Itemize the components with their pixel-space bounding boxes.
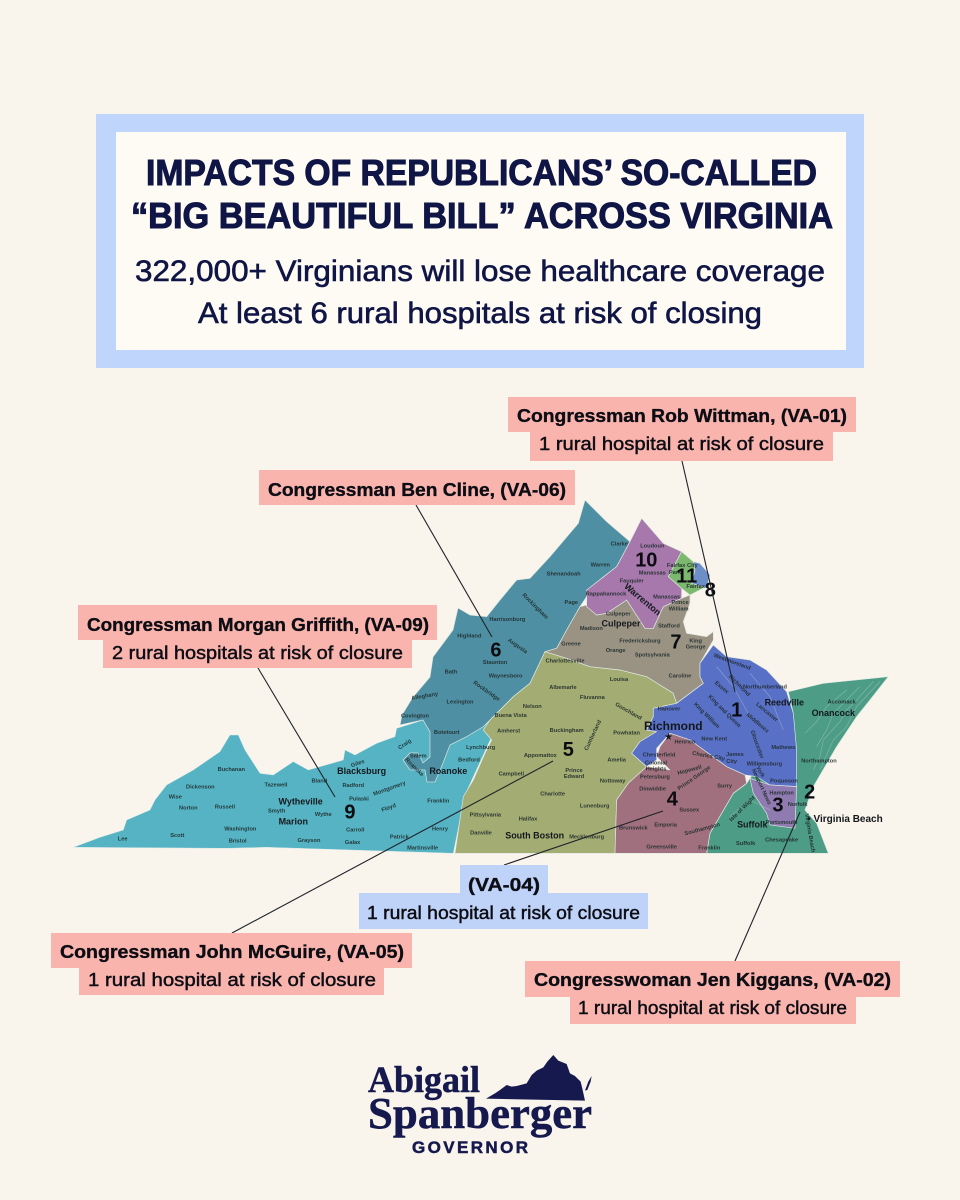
district 9: [73, 680, 493, 853]
county labels east: Charlottesville: [545, 659, 584, 665]
wetlands texture: [717, 667, 880, 817]
county labels east: Mecklenburg: [569, 835, 605, 841]
county labels east: Mathews: [771, 745, 795, 751]
county labels east: Newport News: [750, 768, 772, 806]
county labels east: 4: [667, 789, 678, 811]
county labels east: Halifax: [519, 816, 538, 822]
logo wordmark: Abigail: [368, 1060, 480, 1101]
county labels west: Salem: [410, 754, 427, 760]
district 10: [587, 518, 682, 628]
subheading: At least 6 rural hospitals at risk of closing: [198, 297, 762, 330]
county labels east: Lancaster: [754, 702, 779, 724]
county labels east: Suffolk: [736, 841, 756, 847]
county labels west: Alleghany: [411, 691, 439, 702]
county labels east: Onancock: [812, 708, 855, 718]
district 7: [545, 595, 713, 703]
logo: Abigail Spanberger Governor: [368, 1055, 592, 1157]
county labels east: Warren: [591, 563, 611, 569]
county labels west: Russell: [215, 805, 235, 811]
county labels east: Rappahannock: [586, 592, 627, 598]
county labels east: Shenandoah: [547, 571, 581, 577]
callout: John McGuire VA-05: Congressman John McGuire, (VA-05): [60, 941, 404, 962]
callout: VA-04: 1 rural hospital at risk of closure: [367, 902, 640, 923]
county labels east: Fredericksburg: [619, 639, 661, 645]
callout: VA-04: (VA-04): [468, 874, 540, 895]
county labels east: Caroline: [669, 673, 691, 679]
county labels west: Wise: [169, 795, 182, 801]
county labels east: Prince George: [677, 765, 712, 792]
county labels east: Buckingham: [550, 728, 584, 734]
county labels east: Petersburg: [640, 775, 670, 781]
county labels west: Grayson: [297, 838, 321, 844]
county labels west: Patrick: [390, 835, 410, 841]
county labels east: Stafford: [658, 624, 680, 630]
county labels west: Franklin: [427, 799, 450, 805]
county labels east: Edward: [564, 774, 585, 780]
county labels east: Clarke: [611, 542, 628, 548]
county labels east: Buena Vista: [495, 713, 528, 719]
logo wordmark: [368, 1060, 592, 1138]
district 8: [692, 562, 710, 588]
county labels west: Norton: [179, 806, 198, 812]
county labels east: Lexington: [446, 699, 474, 705]
county labels east: Loudoun: [640, 544, 665, 550]
county labels east: Manassas: [639, 570, 666, 576]
county labels east: 1: [731, 700, 742, 722]
callout: Jen Kiggans VA-02: Congresswoman Jen Kiggans, (VA-02): [534, 969, 891, 990]
county labels east: Prince: [671, 600, 689, 606]
county labels east: 6: [490, 640, 502, 662]
county labels east: 10: [635, 550, 657, 572]
county labels east: Reedville: [765, 697, 804, 707]
county labels east: Suffolk: [737, 820, 768, 830]
callout: Jen Kiggans VA-02: [525, 961, 900, 1024]
county labels east: Virginia Beach: [803, 813, 816, 853]
county labels east: 8: [705, 580, 716, 602]
county labels east: Isle of Wight: [729, 795, 757, 823]
callout: Morgan Griffith VA-09: 2 rural hospitals at risk of closure: [112, 642, 403, 663]
county labels east: Danville: [470, 830, 492, 836]
county labels west: Buchanan: [218, 767, 246, 773]
county labels east: Brunswick: [619, 826, 648, 832]
logo tagline: GOVERNOR: [412, 1138, 528, 1157]
county labels west: Lee: [118, 836, 128, 842]
county labels east: Warrenton: [622, 581, 663, 618]
county labels east: Northampton: [801, 758, 837, 764]
county labels east: Gloucester: [749, 730, 765, 760]
county labels east: Poquoson: [770, 778, 798, 784]
county labels east: Cumberland: [584, 719, 603, 752]
county labels west: Montgomery: [373, 780, 407, 798]
county labels east: Charlotte: [540, 792, 565, 798]
county labels east: Goochland: [614, 702, 643, 722]
county labels east: York: [754, 765, 766, 780]
county labels west: Henry: [432, 826, 449, 832]
county labels west: Pulaski: [349, 797, 369, 803]
county labels east: Highland: [457, 633, 482, 639]
county labels east: • Virginia Beach: [807, 814, 883, 825]
county labels east: Middlesex: [745, 712, 770, 735]
county labels east: Northumberland: [743, 685, 788, 691]
district 6: [400, 500, 630, 782]
county labels east: Amelia: [607, 757, 627, 763]
county labels east: Madison: [580, 626, 603, 632]
county labels east: Chesapeake: [765, 838, 798, 844]
icon: Virginia silhouette: [486, 1055, 592, 1101]
callout: Jen Kiggans VA-02: 1 rural hospital at risk of closure: [578, 997, 847, 1018]
county labels east: ★: [665, 731, 674, 741]
county labels east: Manassas: [653, 594, 680, 600]
callout: Ben Cline VA-06: [259, 470, 575, 505]
callout: Rob Wittman VA-01: [508, 397, 856, 461]
county labels east: King William: [692, 702, 720, 730]
county labels west: Carroll: [346, 827, 365, 833]
county labels east: Hampton: [769, 790, 794, 796]
county labels west: 9: [344, 801, 356, 823]
heading: IMPACTS OF REPUBLICANS’ SO-CALLED: [146, 152, 817, 193]
county labels east: Essex: [713, 680, 730, 696]
county labels east: 2: [804, 781, 815, 803]
county labels east: 5: [563, 739, 574, 761]
county labels east: King and Queen: [707, 694, 742, 729]
county labels west: Floyd: [381, 803, 398, 814]
county labels east: George: [686, 645, 706, 651]
county labels east: Harrisonburg: [489, 617, 526, 623]
county labels west: Bristol: [229, 838, 247, 844]
county labels west: Galax: [345, 840, 361, 846]
county labels east: Southampton: [684, 822, 721, 837]
county labels east: Heights: [646, 767, 666, 773]
county labels east: Hopewell: [677, 764, 703, 777]
county labels east: Westmoreland: [713, 653, 752, 672]
county labels east: Surry: [717, 783, 733, 789]
county labels west: Washington: [224, 827, 257, 833]
districts east of 9: [400, 500, 888, 853]
county labels east: Prince: [565, 768, 583, 774]
county labels east: Culpeper: [602, 619, 641, 629]
county labels west: Roanoke: [403, 757, 425, 778]
district 11: [668, 552, 705, 595]
county labels east: 7: [670, 631, 682, 653]
county labels east: City: [726, 759, 738, 765]
county labels east: Powhatan: [613, 731, 641, 737]
heading: [131, 152, 833, 236]
county labels west: Wythe: [315, 812, 332, 818]
county labels east: 3: [772, 795, 784, 817]
county labels east: Page: [565, 600, 578, 606]
county labels west: Smyth: [268, 809, 286, 815]
county labels east: Williamsburg: [747, 762, 783, 768]
county labels west: Bath: [445, 669, 458, 675]
county labels east: Staunton: [483, 660, 508, 666]
county labels west: Bland: [311, 779, 328, 785]
callout: VA-04: [359, 865, 648, 929]
county labels east: Campbell: [499, 772, 524, 778]
county labels west: Radford: [342, 783, 365, 789]
heading: “BIG BEAUTIFUL BILL” ACROSS VIRGINIA: [131, 195, 833, 236]
county labels east: Sussex: [679, 808, 700, 814]
county labels east: King: [689, 639, 702, 645]
county labels east: Waynesboro: [489, 674, 523, 680]
county labels west: Blacksburg: [337, 766, 386, 776]
district 1: [632, 645, 797, 787]
county labels east: Charles City: [692, 751, 726, 763]
county labels east: James: [726, 752, 744, 758]
county labels east: Orange: [606, 648, 626, 654]
county labels east: Colonial: [645, 760, 668, 766]
county labels west: Scott: [170, 833, 185, 839]
county labels east: Rockingham: [521, 592, 549, 621]
callout: John McGuire VA-05: [51, 933, 412, 995]
county labels east: Lynchburg: [466, 745, 496, 751]
county labels east: Accomack: [827, 700, 857, 706]
county labels east: Chesterfield: [643, 752, 676, 758]
county labels east: Richmond: [644, 719, 703, 733]
county labels east: Rockbridge: [472, 680, 501, 703]
county labels east: Franklin: [698, 845, 721, 851]
county labels east: Appomattox: [524, 753, 558, 759]
callout: Morgan Griffith VA-09: [78, 605, 437, 668]
county labels west: Wytheville: [279, 797, 323, 807]
county labels east: Spotsylvania: [635, 653, 671, 659]
county labels east: Greene: [561, 641, 581, 647]
county labels east: Amherst: [497, 728, 520, 734]
map of Virginia congressional districts: [73, 500, 888, 853]
county labels east: William: [669, 606, 689, 612]
district 2: [707, 677, 888, 853]
callout: Rob Wittman VA-01: Congressman Rob Wittman, (VA-01): [517, 405, 847, 426]
county labels west: Craig: [397, 738, 413, 751]
county labels east: Fairfax City: [667, 563, 699, 569]
county labels east: Fauquier: [620, 578, 644, 584]
county labels west: Martinsville: [407, 845, 438, 851]
title panel: [96, 114, 864, 368]
callout: Morgan Griffith VA-09: Congressman Morgan Griffith, (VA-09): [87, 614, 429, 635]
callout: Ben Cline VA-06: Congressman Ben Cline, (VA-06): [268, 479, 566, 500]
county labels east: Nelson: [523, 704, 542, 710]
logo wordmark: Spanberger: [368, 1089, 592, 1138]
county labels east: Emporia: [654, 823, 678, 829]
district 3: [750, 778, 797, 828]
county labels east: New Kent: [701, 737, 727, 743]
county labels west: [118, 669, 467, 851]
county labels east: South Boston: [505, 831, 564, 841]
county labels east: Park: [669, 570, 682, 576]
subheading: 322,000+ Virginians will lose healthcare coverage: [135, 255, 825, 288]
county labels west: Marion: [279, 817, 308, 827]
county labels east: Bedford: [458, 758, 480, 764]
callout: Rob Wittman VA-01: 1 rural hospital at risk of closure: [539, 433, 824, 454]
callout: John McGuire VA-05: 1 rural hospital at risk of closure: [88, 969, 376, 990]
county labels east: Culpeper: [606, 611, 631, 617]
county labels east: [446, 542, 883, 853]
county labels east: Fairfax: [686, 584, 706, 590]
county labels east: Nottoway: [600, 779, 626, 785]
county labels east: Dinwiddie: [639, 787, 666, 793]
county labels east: Norfolk: [788, 802, 808, 808]
county labels west: Giles: [350, 759, 365, 769]
county labels east: Louisa: [610, 677, 629, 683]
county labels east: Albemarle: [549, 685, 577, 691]
county labels east: Fluvanna: [580, 695, 606, 701]
subheading: [135, 255, 825, 330]
district 4: [615, 733, 747, 853]
district 5: [455, 652, 677, 853]
county labels west: Roanoke: [429, 766, 467, 776]
county labels east: Richmond: [727, 674, 751, 698]
leader lines: [232, 461, 800, 961]
county labels west: Botetourt: [434, 730, 459, 736]
county labels east: Greensville: [646, 844, 677, 850]
county labels east: Lunenburg: [580, 803, 610, 809]
county labels west: Tazewell: [265, 783, 288, 789]
county labels east: 11: [676, 565, 697, 587]
county labels east: Henrico: [674, 740, 696, 746]
county labels east: Augusta: [506, 638, 529, 656]
county labels west: Dickenson: [186, 785, 215, 791]
county labels west: Covington: [401, 714, 429, 720]
county labels east: Hanover: [658, 707, 681, 713]
county labels east: Pittsylvania: [470, 812, 502, 818]
county labels east: Portsmouth: [766, 820, 798, 826]
